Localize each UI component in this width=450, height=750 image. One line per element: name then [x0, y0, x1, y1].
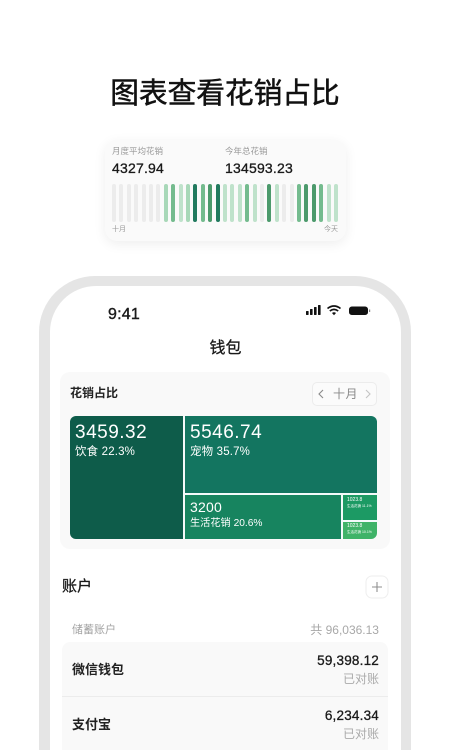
phone screen — [50, 286, 401, 750]
status bar time: 9:41 — [108, 306, 140, 323]
axis label: start: 十月 — [112, 226, 126, 233]
block: pets: 宠物 35.7% — [190, 446, 250, 458]
block: small category two: 1023.8 — [347, 523, 362, 529]
label: savings accounts: 储蓄账户 — [72, 624, 116, 636]
block: pets — [185, 416, 377, 493]
title: 图表查看花销占比 — [110, 78, 340, 110]
block: small category one: 生活花销 11.1% — [347, 504, 372, 508]
block: food: 饮食 22.3% — [75, 446, 135, 458]
block: food: 3459.32 — [75, 422, 147, 442]
block: food — [70, 416, 183, 539]
row: alipay: 支付宝 — [72, 716, 111, 732]
row: alipay — [72, 708, 379, 741]
panel: spending share — [60, 372, 390, 549]
block: small category one: 1023.8 — [347, 497, 362, 503]
row: wechat wallet: 59,398.12 — [317, 652, 379, 668]
button: add account — [366, 576, 388, 598]
panel: account list — [62, 642, 388, 750]
block: pets: 5546.74 — [190, 422, 262, 442]
icon: status bar signal, wifi, battery — [306, 305, 370, 316]
row: wechat wallet: 已对账 — [343, 672, 379, 686]
month selector: 十月 — [333, 387, 358, 401]
phone frame — [39, 276, 411, 750]
row: alipay: 6,234.34 — [325, 708, 379, 722]
row: wechat wallet — [62, 642, 388, 697]
axis label: end: 今天 — [324, 226, 338, 233]
block: small category one — [343, 495, 377, 520]
block: small category two — [343, 522, 377, 539]
panel: spending summary card — [105, 140, 346, 241]
block: living — [185, 495, 341, 539]
row: wechat wallet: 微信钱包 — [72, 662, 124, 676]
month selector — [312, 382, 377, 406]
page title: 钱包 — [210, 340, 242, 357]
block: small category two: 生活花销 10.1% — [347, 530, 372, 534]
number: yearly total: 134593.23 — [225, 160, 293, 176]
block: living: 3200 — [190, 499, 222, 515]
label: savings total: 共 96,036.13 — [310, 623, 379, 637]
row: alipay: 已对账 — [343, 727, 379, 741]
heading: accounts: 账户 — [62, 578, 92, 595]
block: living: 生活花销 20.6% — [190, 518, 262, 528]
bar chart: daily spending — [112, 184, 338, 222]
treemap chart — [70, 416, 377, 539]
label: yearly total: 今年总花销 — [225, 146, 268, 156]
heading: 花销占比 — [70, 386, 118, 400]
number: monthly average: 4327.94 — [112, 160, 164, 176]
label: monthly average: 月度平均花销 — [112, 146, 163, 156]
